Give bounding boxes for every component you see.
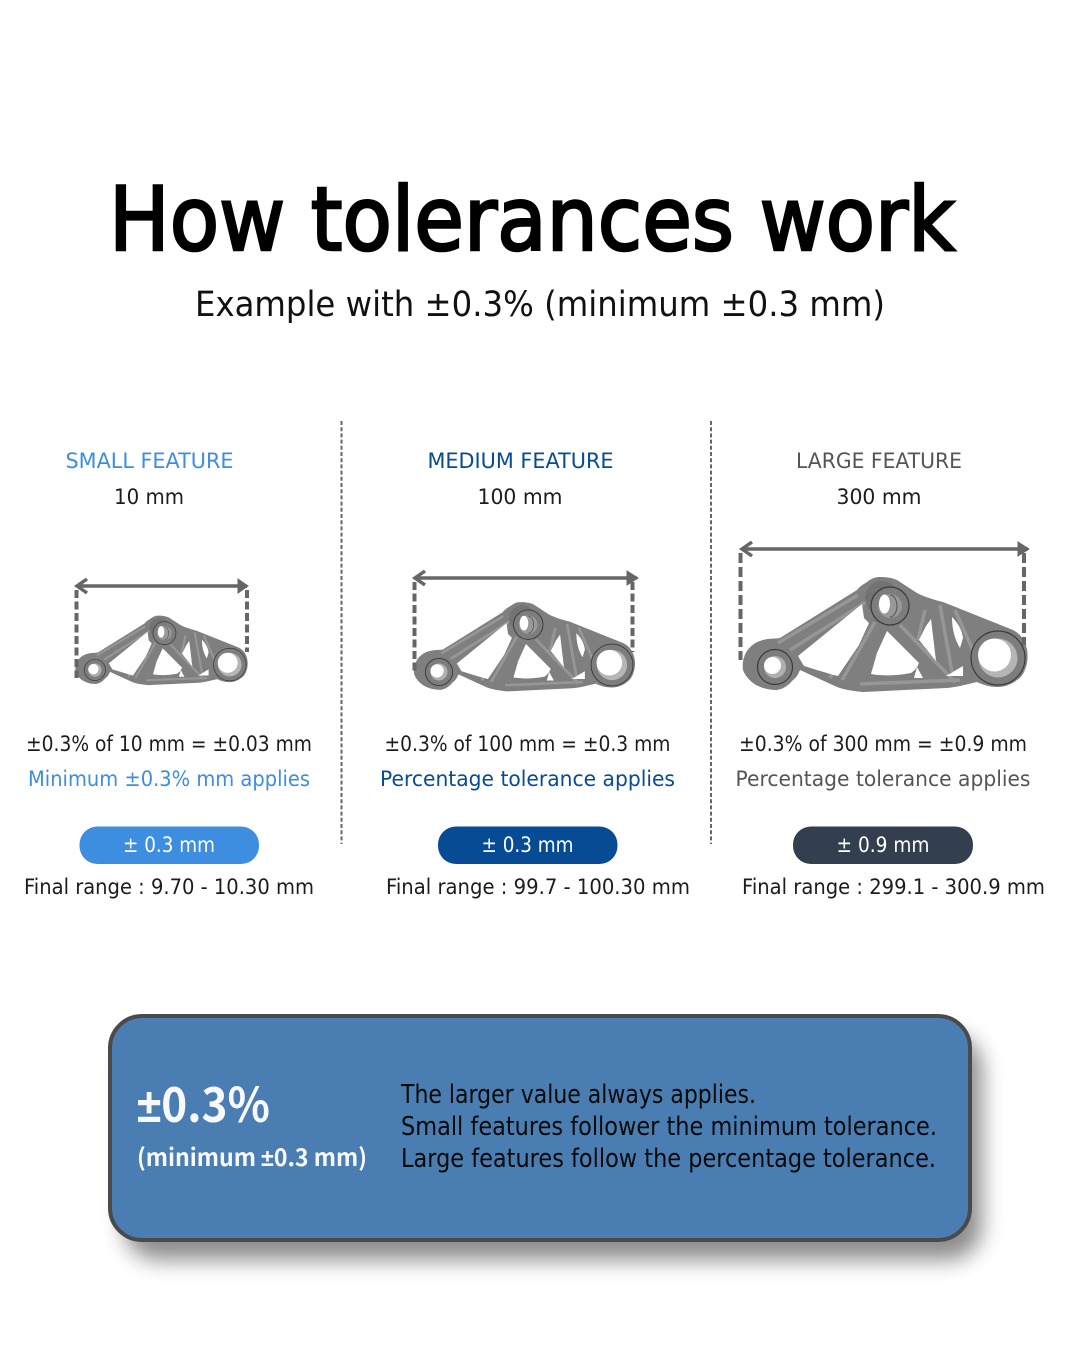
large calculation: ±0.3% of 300 mm = ±0.9 mm (739, 732, 1027, 756)
callout explanation: Small features follower the minimum tolerance. (401, 1112, 937, 1142)
arrow: large dimension (740, 542, 1029, 660)
icon: small bracket (75, 616, 248, 685)
panel: large feature (736, 449, 1045, 899)
small final range: Final range : 9.70 - 10.30 mm (24, 875, 314, 899)
large feature size: 300 mm (836, 485, 922, 509)
small tolerance pill: ± 0.3 mm (123, 833, 215, 857)
medium rule: Percentage tolerance applies (380, 767, 675, 791)
title: How tolerances work (109, 168, 955, 271)
small tolerance pill (80, 826, 259, 864)
arrow: medium dimension (414, 571, 638, 672)
subtitle: Example with ±0.3% (minimum ±0.3 mm) (195, 285, 885, 325)
medium tolerance pill (438, 826, 618, 864)
medium final range: Final range : 99.7 - 100.30 mm (386, 875, 690, 899)
icon: large bracket (743, 577, 1028, 692)
large rule: Percentage tolerance applies (736, 767, 1030, 791)
callout explanation (400, 1080, 937, 1174)
small calculation: ±0.3% of 10 mm = ±0.03 mm (26, 732, 312, 756)
medium feature heading: MEDIUM FEATURE (428, 449, 614, 473)
icon: medium bracket (414, 602, 635, 691)
medium feature size: 100 mm (478, 485, 562, 509)
large feature heading: LARGE FEATURE (796, 449, 962, 473)
panel: medium feature (380, 449, 690, 899)
callout explanation: The larger value always applies. (400, 1080, 756, 1110)
divider left (340, 421, 342, 844)
callout big value: ±0.3% (137, 1066, 270, 1136)
callout minimum note: (minimum ±0.3 mm) (137, 1138, 367, 1173)
small rule: Minimum ±0.3% mm applies (28, 767, 310, 791)
large tolerance pill: ± 0.9 mm (836, 833, 930, 857)
small feature heading: SMALL FEATURE (66, 449, 234, 473)
small feature size: 10 mm (114, 485, 184, 509)
large tolerance pill (793, 826, 973, 864)
large final range: Final range : 299.1 - 300.9 mm (742, 875, 1045, 899)
arrow: small dimension (76, 579, 248, 678)
medium calculation: ±0.3% of 100 mm = ±0.3 mm (384, 732, 670, 756)
divider right (710, 421, 712, 844)
callout explanation: Large features follow the percentage tolerance. (401, 1144, 936, 1174)
panel: summary callout (110, 1016, 982, 1260)
panel: small feature (24, 449, 314, 899)
medium tolerance pill: ± 0.3 mm (482, 833, 574, 857)
